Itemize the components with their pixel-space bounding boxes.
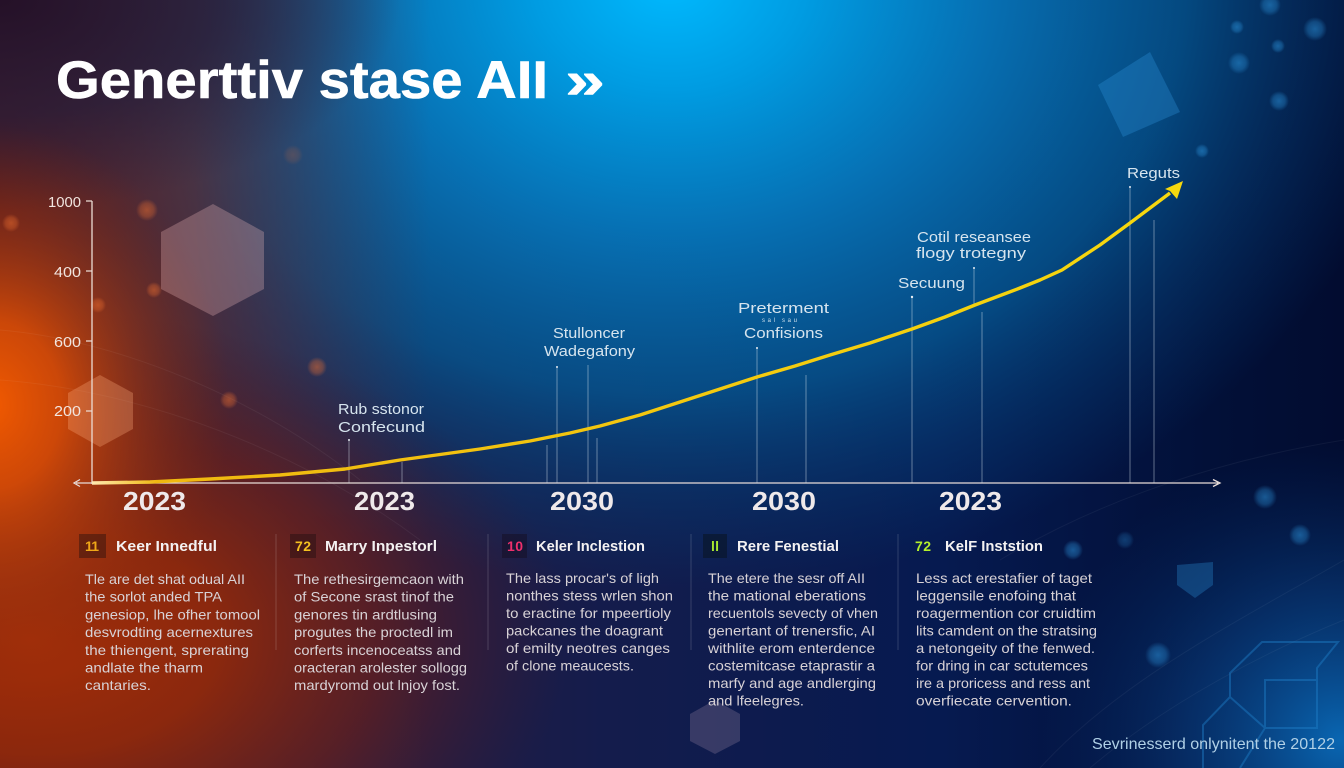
title: » — [565, 51, 605, 110]
body text: marfy and age andlerging — [708, 675, 876, 691]
badge ll: ll — [711, 538, 719, 554]
body text: lits camdent on the stratsing — [916, 622, 1097, 638]
body text: of clone meaucests. — [506, 658, 634, 674]
panel: column 5 — [915, 538, 1097, 708]
body text — [294, 571, 467, 693]
body text: Tle are det shat odual AII — [85, 571, 245, 587]
body text: of Secone srast tinof the — [294, 589, 454, 605]
body text: The lass procar's of ligh — [506, 570, 659, 586]
x axis year labels — [123, 486, 1002, 516]
y axis — [86, 201, 92, 484]
decorative hexagon bottom — [690, 700, 740, 754]
decorative circuit outline — [1203, 642, 1338, 768]
panel: column 1 — [79, 534, 260, 693]
panel: column 4 — [703, 534, 878, 708]
body text: cantaries. — [85, 677, 151, 693]
milestone labels: Confecund — [338, 419, 425, 436]
body text: corferts incenoceatss and — [294, 642, 461, 658]
x axis year labels: 2023 — [354, 486, 415, 516]
body text: to eractine for mpeertioly — [506, 605, 671, 621]
body text: oracteran arolester sollogg — [294, 660, 467, 676]
milestone labels — [338, 165, 1180, 436]
title: Generttiv stase AII — [56, 51, 548, 110]
badge 72: 72 — [295, 538, 311, 554]
badge 72 — [290, 534, 316, 558]
x axis year labels: 2030 — [550, 486, 614, 516]
milestone labels: Secuung — [898, 275, 965, 292]
body text: of emilty neotres canges — [506, 640, 670, 656]
body text: costemitcase etaprastir a — [708, 658, 875, 674]
body text: progutes the proctedl im — [294, 624, 453, 640]
body text: withlite erom enterdence — [707, 640, 875, 656]
body text: and lfeelegres. — [708, 692, 804, 708]
heading: Rere Fenestial — [737, 539, 839, 555]
x axis year labels: 2030 — [752, 486, 816, 516]
badge 10: 10 — [507, 538, 523, 554]
growth curve arrow — [92, 181, 1183, 483]
x axis — [74, 480, 1220, 486]
milestone labels: sal sau — [762, 318, 797, 324]
body text: genesiop, lhe ofher tomool — [85, 606, 260, 622]
milestone stems — [348, 186, 1154, 483]
milestone labels: Stulloncer — [553, 325, 625, 342]
body text: Less act erestafier of taget — [916, 570, 1092, 586]
milestone labels: Confisions — [744, 325, 823, 342]
body text — [916, 570, 1097, 708]
body text: a netongeity of the fenwed. — [916, 640, 1095, 656]
y axis labels: 400 — [54, 265, 81, 281]
body text: roagermention cor cruidtim — [916, 605, 1096, 621]
milestone labels: Wadegafony — [544, 343, 636, 360]
badge 72 lime: 72 — [915, 538, 931, 554]
milestone labels: Rub sstonor — [338, 401, 424, 418]
y axis labels — [48, 195, 81, 420]
heading: Keler Inclestion — [536, 539, 645, 555]
y axis labels: 200 — [54, 404, 81, 420]
body text: packcanes the doagrant — [506, 622, 663, 638]
body text: leggensile enofoing that — [916, 588, 1076, 604]
panel: column 2 — [290, 534, 467, 693]
body text: ire a proricess and ress ant — [916, 675, 1090, 691]
heading: KelF Inststion — [945, 539, 1043, 555]
heading: Keer Innedful — [116, 539, 217, 555]
footer note: Sevrinesserd onlynitent the 20122 — [1092, 736, 1335, 753]
heading: Marry Inpestorl — [325, 539, 437, 555]
body text — [506, 570, 673, 674]
body text: genores tin ardtlusing — [294, 606, 437, 622]
body text: the thiengent, sprerating — [85, 642, 249, 658]
y axis labels: 1000 — [48, 195, 81, 211]
body text: the mational eberations — [708, 588, 866, 604]
badge 10 — [502, 534, 527, 558]
body text — [85, 571, 260, 693]
body text: mardyromd out lnjoy fost. — [294, 677, 460, 693]
decorative hexagon small — [68, 375, 133, 447]
body text: The etere the sesr off AII — [708, 570, 865, 586]
milestone labels: Cotil reseansee — [917, 229, 1031, 246]
body text: andlate the tharm — [85, 660, 203, 676]
column dividers — [276, 534, 898, 650]
body text: for dring in car sctutemces — [916, 658, 1088, 674]
body text — [707, 570, 878, 708]
line chart — [48, 165, 1220, 516]
badge 11: 11 — [85, 538, 99, 554]
panel: column 3 — [502, 534, 673, 674]
body text: nonthes stess wrlen shon — [506, 588, 673, 604]
badge 11 — [79, 534, 106, 558]
body text: desvrodting acernextures — [85, 624, 253, 640]
body text: the sorlot anded TPA — [85, 589, 223, 605]
badge ll — [703, 534, 727, 558]
body text: overfiecate cervention. — [916, 692, 1072, 708]
body text: recuentols sevecty of vhen — [708, 605, 878, 621]
y axis labels: 600 — [54, 335, 81, 351]
body text: genertant of trenersfic, AI — [708, 622, 875, 638]
body text: The rethesirgemcaon with — [294, 571, 464, 587]
milestone labels: Preterment — [738, 300, 830, 317]
x axis year labels: 2023 — [939, 486, 1002, 516]
decorative rotated square — [1098, 52, 1180, 137]
decorative hexagon large — [161, 204, 264, 316]
milestone labels: flogy trotegny — [916, 245, 1027, 262]
milestone labels: Reguts — [1127, 165, 1180, 182]
x axis year labels: 2023 — [123, 486, 186, 516]
